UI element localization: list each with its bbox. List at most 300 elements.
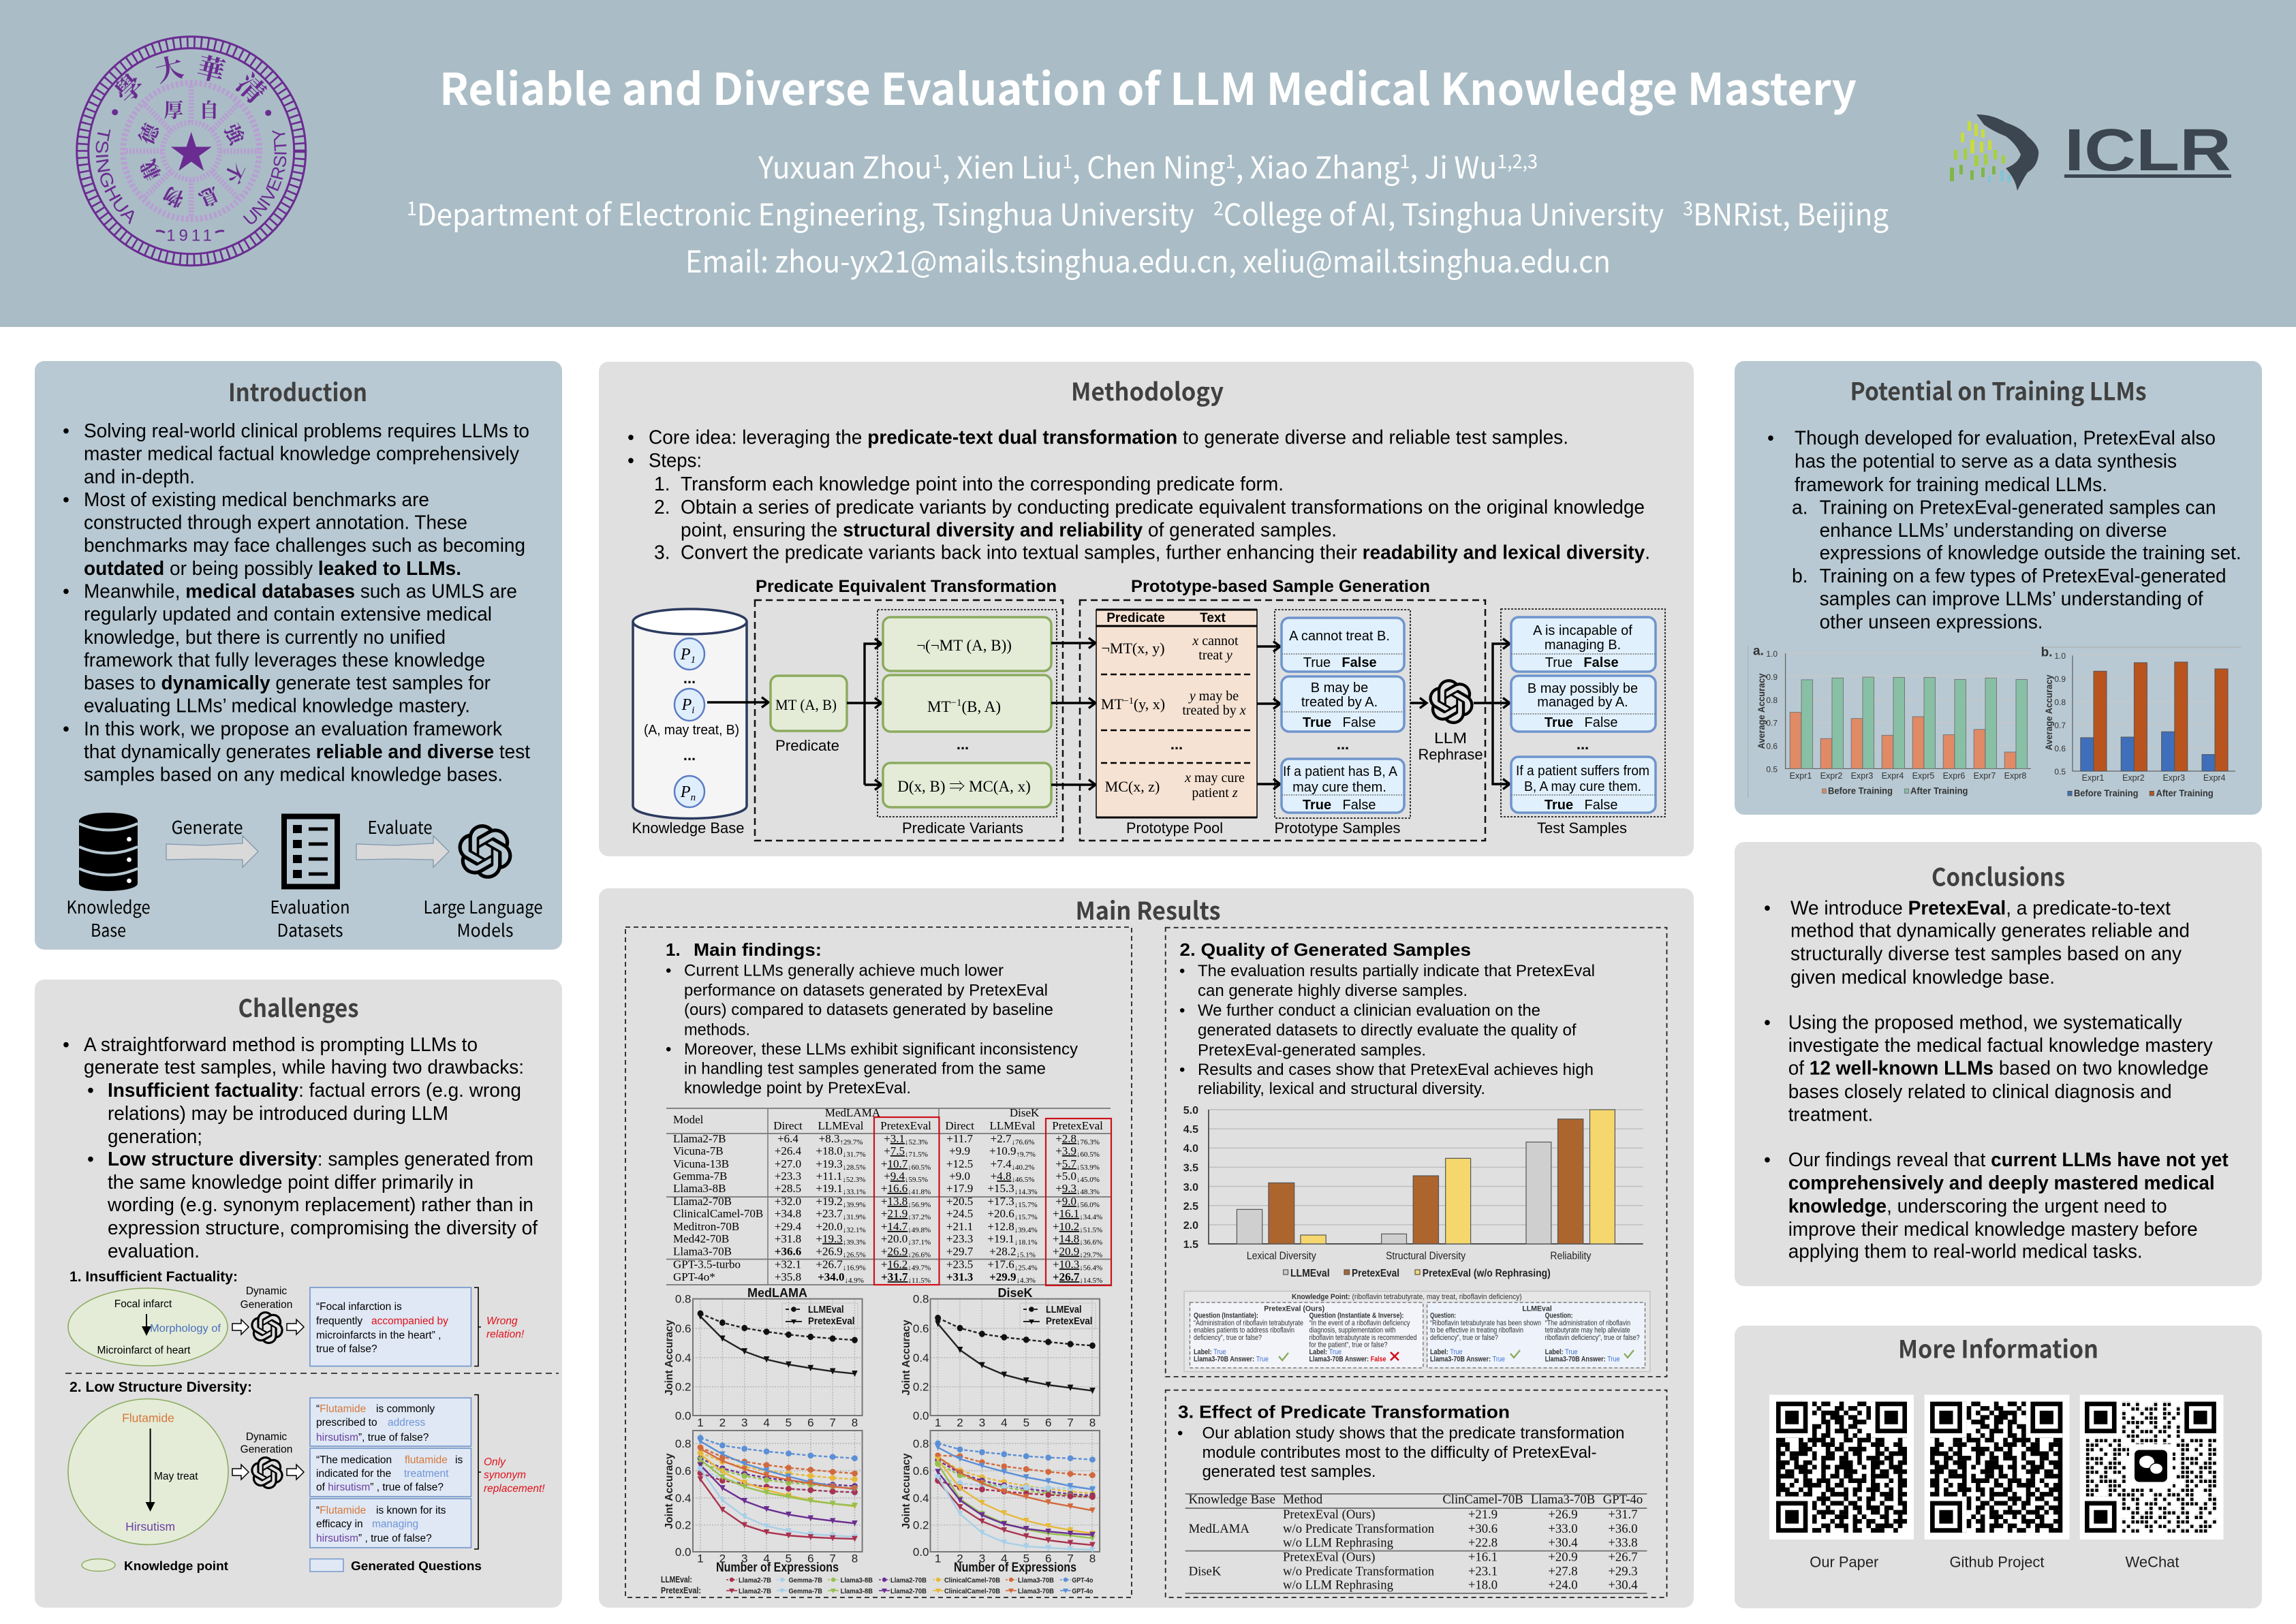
results table: ↓40.2% bbox=[1011, 1164, 1034, 1172]
results table: ↓52.3% bbox=[842, 1176, 865, 1184]
text block: introduction bullets: and in-depth. bbox=[84, 465, 195, 487]
case study comparison: PretexEval (Ours) bbox=[1264, 1305, 1324, 1313]
text block: potential bullets: other unseen expressions. bbox=[1820, 610, 2043, 632]
text block: quality bullets: can generate highly diverse samples. bbox=[1198, 982, 1468, 1000]
results table: +20.5 bbox=[946, 1195, 973, 1208]
text block: challenges bullets bbox=[63, 1033, 538, 1262]
results table: Med42-70B bbox=[673, 1232, 729, 1245]
authors: , Xien Liu bbox=[942, 144, 1062, 187]
predicate variants: ¬(¬MT (A, B)) bbox=[916, 637, 1012, 654]
results table: +11.1 bbox=[816, 1170, 842, 1183]
legend: Knowledge point bbox=[124, 1559, 228, 1573]
text block: conclusions bullets: bases closely related to clinical diagnosis and bbox=[1788, 1080, 2172, 1102]
chart legend: Gemma-7B bbox=[789, 1588, 822, 1595]
text block: challenges bullets: • bbox=[87, 1079, 94, 1101]
chart: DiseK aggregate: 0.6 bbox=[913, 1322, 929, 1335]
bar chart b: unseen expressions: Average Accuracy bbox=[2044, 674, 2054, 751]
text block: potential bullets: • bbox=[1767, 427, 1774, 449]
test samples: B may possibly be bbox=[1527, 681, 1638, 696]
results table: ↓31.9% bbox=[843, 1213, 866, 1221]
icon: evaluation checklist bbox=[284, 816, 337, 887]
ablation table: w/o Predicate Transformation bbox=[1283, 1564, 1435, 1578]
results table: ↓5.1% bbox=[1016, 1251, 1036, 1259]
authors: 1 bbox=[1226, 147, 1236, 174]
bar chart a: expressions outside training: a. bbox=[1753, 644, 1764, 658]
bar chart: diversity and reliability: 2.5 bbox=[1183, 1201, 1198, 1213]
case study comparison: Llama3-70B Answer: False bbox=[1309, 1356, 1386, 1364]
results table: +26.7 bbox=[816, 1258, 843, 1270]
bar chart: diversity and reliability: Lexical Diversity bbox=[1247, 1251, 1316, 1262]
results table: +31.3 bbox=[946, 1270, 973, 1283]
arrow: evaluate: Evaluate bbox=[368, 814, 432, 839]
chart: DiseK per model: 0.2 bbox=[913, 1519, 929, 1532]
prototype pool table: treated by x bbox=[1182, 703, 1246, 718]
authors: , Ji Wu bbox=[1410, 144, 1497, 187]
text block: conclusions bullets: • bbox=[1764, 897, 1771, 919]
panel: Introduction bbox=[35, 361, 562, 950]
bar chart a: expressions outside training: 1.0 bbox=[1766, 649, 1778, 659]
label: Large Language Models: Large Language bbox=[424, 894, 542, 919]
text block: challenges bullets: generation; bbox=[108, 1125, 202, 1147]
chart: MedLAMA aggregate: PretexEval bbox=[808, 1315, 854, 1327]
generated question boxes: address bbox=[388, 1417, 425, 1428]
heading: More Information: More Information bbox=[1898, 1330, 2098, 1366]
knowledge point ellipse: Flutamide bbox=[122, 1411, 174, 1425]
results table: GPT-4o* bbox=[673, 1270, 715, 1283]
case study comparison: Question: bbox=[1430, 1312, 1456, 1320]
text block: conclusions bullets: We introduce PretexEval, a predicate-to-text bbox=[1790, 897, 2171, 919]
label: WeChat: WeChat bbox=[2126, 1553, 2179, 1571]
bar chart a: expressions outside training: Expr4 bbox=[1882, 771, 1904, 781]
chart: DiseK per model: 12345678 bbox=[935, 1552, 1096, 1565]
text block: introduction bullets: knowledge, but there is currently no unified bbox=[84, 626, 446, 648]
case study comparison: “The administration of riboflavin bbox=[1545, 1319, 1630, 1327]
dynamic generation step: Dynamic bbox=[246, 1431, 287, 1443]
text block: methodology steps: 3. bbox=[654, 542, 670, 563]
results table: Llama3-8B bbox=[673, 1182, 726, 1195]
case study comparison: diagnosis, supplementation with bbox=[1309, 1326, 1396, 1334]
label: Knowledge Base bbox=[67, 894, 150, 942]
arrow: evaluate bbox=[356, 814, 449, 867]
results table: +29.9 bbox=[989, 1270, 1017, 1283]
text block: potential bullets: framework for training medical LLMs. bbox=[1795, 473, 2107, 495]
logo: Tsinghua University seal: 大 bbox=[153, 52, 187, 88]
panel: Main Results bbox=[599, 888, 1694, 1608]
results table: +10.9 bbox=[989, 1144, 1016, 1157]
text block: conclusions bullets: Our findings reveal that current LLMs have not yet bbox=[1788, 1149, 2229, 1170]
text block: introduction bullets: outdated or being possibly leaked to LLMs. bbox=[84, 557, 461, 579]
logo: ICLR: ICLR bbox=[2064, 117, 2231, 183]
LLM rephrase step: LLM bbox=[1434, 730, 1467, 747]
text block: quality bullets: Results and cases show that PretexEval achieves high bbox=[1198, 1061, 1594, 1079]
prototype pool table: Predicate bbox=[1106, 611, 1165, 625]
bar chart b: unseen expressions: After Training bbox=[2156, 788, 2214, 798]
heading: Potential on Training LLMs: Potential on Training LLMs bbox=[1850, 373, 2146, 408]
results table: ↓15.7% bbox=[1014, 1213, 1038, 1221]
generated question box: accompanied by bbox=[371, 1315, 448, 1327]
text block: potential bullets: has the potential to serve as a data synthesis bbox=[1795, 450, 2177, 471]
bar chart a: expressions outside training: 0.8 bbox=[1766, 696, 1778, 705]
text block: introduction bullets: • bbox=[63, 580, 69, 602]
chart: MedLAMA per model: Number of Expressions bbox=[716, 1561, 839, 1575]
case study comparison: “Riboflavin tetrabutyrate has been shown bbox=[1430, 1319, 1541, 1327]
label: Evaluation Datasets: Datasets bbox=[277, 917, 343, 942]
results table: ↓49.7% bbox=[907, 1264, 931, 1272]
results table: +36.6 bbox=[775, 1245, 801, 1258]
results table: ↓39.9% bbox=[843, 1201, 866, 1209]
bar chart a: expressions outside training: Expr1 bbox=[1790, 771, 1812, 781]
ablation table: +27.8 bbox=[1548, 1564, 1578, 1578]
results table: +32.0 bbox=[775, 1195, 801, 1208]
authors: , Xiao Zhang bbox=[1236, 144, 1400, 187]
logo: ICLR bbox=[1950, 114, 2231, 191]
heading: Introduction: Introduction bbox=[228, 373, 367, 409]
results table: ↑9.7% bbox=[1016, 1151, 1036, 1159]
logo: Tsinghua University seal: 學 bbox=[109, 68, 150, 110]
prototype pool table: treat y bbox=[1198, 648, 1232, 663]
results table: PretexEval bbox=[1052, 1119, 1103, 1132]
arrows: pool to prototype samples bbox=[1257, 646, 1280, 784]
results table: +3.1 bbox=[884, 1132, 905, 1145]
bar chart: diversity and reliability: 5.0 bbox=[1183, 1105, 1198, 1116]
chart legend: GPT-4o bbox=[1072, 1577, 1093, 1584]
logo: Tsinghua University seal: 德 bbox=[135, 119, 164, 148]
text block: challenges bullets: A straightforward method is prompting LLMs to bbox=[84, 1033, 478, 1055]
text block: methodology steps: 2. bbox=[654, 496, 670, 518]
predicate variants: −1 bbox=[951, 698, 961, 708]
heading: Conclusions: Conclusions bbox=[1932, 858, 2065, 894]
generated question boxes: hirsutism” , true of false? bbox=[316, 1533, 432, 1544]
chart legend: Llama3-70B bbox=[1018, 1588, 1054, 1595]
chart legend: PretexEval: bbox=[661, 1586, 701, 1595]
prototype pool table: (y, x) bbox=[1134, 696, 1165, 713]
results table: ↓71.5% bbox=[905, 1151, 928, 1159]
text block: methodology steps: Convert the predicate variants back into textual samples, further enhancing their readability and lexical diversity. bbox=[681, 542, 1650, 563]
bar chart a: expressions outside training: Expr8 bbox=[2004, 771, 2026, 781]
text block: introduction bullets: benchmarks may face challenges such as becoming bbox=[84, 534, 525, 556]
chart: MedLAMA per model: Joint Accuracy bbox=[664, 1453, 675, 1529]
text block: conclusions bullets: comprehensively and deeply mastered medical bbox=[1788, 1172, 2215, 1193]
dynamic generation step bbox=[232, 1285, 304, 1344]
diagram: low structure diversity bbox=[68, 1379, 545, 1549]
results table: ↓37.1% bbox=[907, 1238, 931, 1247]
generated question box: frequently bbox=[316, 1315, 362, 1327]
results table: ↑29.7% bbox=[839, 1138, 863, 1146]
callout: wrong relation: Wrong bbox=[486, 1315, 518, 1327]
case study comparison: Question: bbox=[1545, 1312, 1573, 1320]
chart: MedLAMA aggregate: 0.4 bbox=[675, 1352, 691, 1364]
text block: potential bullets bbox=[1767, 427, 2241, 632]
results table: ↓60.5% bbox=[907, 1164, 931, 1172]
chart: MedLAMA per model: 0.0 bbox=[675, 1546, 691, 1559]
text block: potential bullets: Training on PretexEval-generated samples can bbox=[1820, 497, 2216, 518]
chart: MedLAMA aggregate: 0.0 bbox=[675, 1409, 691, 1422]
authors: 1 bbox=[1062, 147, 1072, 174]
text block: main findings: • bbox=[666, 961, 671, 980]
results table: Vicuna-7B bbox=[673, 1144, 724, 1157]
prototype samples: True bbox=[1303, 798, 1331, 813]
chart legend: LLMEval: bbox=[661, 1575, 692, 1584]
results table: ↓4.3% bbox=[1017, 1277, 1036, 1285]
chart: MedLAMA aggregate: 0.2 bbox=[675, 1381, 691, 1394]
test samples: managed by A. bbox=[1537, 695, 1628, 710]
results table: +34.8 bbox=[775, 1207, 801, 1220]
prototype pool table: ¬MT(x, y) bbox=[1101, 640, 1165, 657]
generated question box: microinfarcts in the heart” , bbox=[316, 1330, 441, 1341]
label: Large Language Models bbox=[424, 894, 542, 942]
chart legend bbox=[661, 1575, 1093, 1595]
results table: +14.7 bbox=[881, 1220, 907, 1233]
prototype pool table: MC(x, z) bbox=[1105, 778, 1160, 795]
prototype pool table: x may cure bbox=[1184, 770, 1245, 785]
prototype pool table: −1 bbox=[1123, 696, 1134, 706]
text block: potential bullets: b. bbox=[1792, 565, 1808, 587]
logo: Tsinghua University seal: 1911 bbox=[166, 226, 215, 245]
knowledge base cylinder: ... bbox=[683, 747, 696, 764]
text block: introduction bullets: constructed through expert annotation. These bbox=[84, 512, 467, 533]
text block: introduction bullets: master medical factual knowledge comprehensively bbox=[84, 443, 520, 465]
results table: ClinicalCamel-70B bbox=[673, 1207, 763, 1220]
text block: introduction bullets: Solving real-world clinical problems requires LLMs to bbox=[84, 420, 529, 441]
text block: conclusions bullets: knowledge, underscoring the urgent need to bbox=[1788, 1195, 2167, 1217]
case study comparison: riboflavin tetrabutyrate is recommended bbox=[1309, 1334, 1417, 1342]
text block: potential bullets: Training on a few types of PretexEval-generated bbox=[1820, 565, 2227, 587]
results table: +23.7 bbox=[816, 1207, 843, 1220]
bar chart a: expressions outside training: 0.6 bbox=[1766, 741, 1778, 751]
icon: database bbox=[79, 813, 138, 891]
case study comparison: deficiency”, true or false? bbox=[1194, 1334, 1262, 1342]
test samples: B, A may cure them. bbox=[1524, 779, 1641, 794]
ablation table: +30.4 bbox=[1548, 1536, 1578, 1550]
text block: quality bullets: The evaluation results partially indicate that PretexEval bbox=[1198, 962, 1595, 980]
results table: +19.1 bbox=[816, 1182, 843, 1195]
emails: Email: zhou-yx21@mails.tsinghua.edu.cn, xeliu@mail.tsinghua.edu.cn bbox=[685, 238, 1611, 281]
label: Our Paper: Our Paper bbox=[1810, 1553, 1878, 1571]
generated question boxes: efficacy in bbox=[316, 1518, 363, 1530]
results table: ↓48.3% bbox=[1076, 1188, 1100, 1196]
knowledge point ellipse bbox=[68, 1399, 228, 1545]
knowledge point ellipse bbox=[68, 1288, 228, 1366]
prototype samples: False bbox=[1343, 798, 1376, 813]
subheading: effect: 3. Effect of Predicate Transformation bbox=[1178, 1402, 1510, 1422]
results table: Llama2-7B bbox=[673, 1132, 726, 1145]
results table: +17.6 bbox=[987, 1258, 1014, 1270]
results table: Llama2-70B bbox=[673, 1195, 732, 1208]
results table: +26.9 bbox=[881, 1245, 907, 1258]
text block: main findings: • bbox=[666, 1040, 671, 1059]
results table: +17.3 bbox=[987, 1195, 1014, 1208]
logo: Tsinghua University seal: 清 bbox=[230, 68, 271, 109]
text block: quality bullets bbox=[1179, 962, 1595, 1098]
results table: +6.4 bbox=[777, 1132, 798, 1145]
text block: main findings: (ours) compared to datasets generated by baseline bbox=[684, 1001, 1053, 1019]
bar chart b: unseen expressions: 1.0 bbox=[2054, 651, 2066, 661]
chart legend: Llama3-8B bbox=[841, 1588, 873, 1595]
ablation table: +31.7 bbox=[1608, 1508, 1638, 1522]
bar chart a: expressions outside training: Expr3 bbox=[1851, 771, 1873, 781]
results table: +19.2 bbox=[816, 1195, 843, 1208]
results table: ↓45.0% bbox=[1076, 1176, 1100, 1184]
results table: LLMEval bbox=[818, 1119, 864, 1132]
bar chart: diversity and reliability: 3.0 bbox=[1183, 1182, 1198, 1193]
results table: ↓26.6% bbox=[907, 1251, 931, 1259]
prototype samples: False bbox=[1341, 655, 1377, 670]
bar chart: diversity and reliability: 1.5 bbox=[1183, 1239, 1198, 1251]
panel: Potential on Training LLMs bbox=[1735, 361, 2262, 815]
text block: introduction bullets bbox=[63, 420, 530, 785]
affiliations: College of AI, Tsinghua University bbox=[1224, 191, 1683, 234]
header banner bbox=[0, 0, 2296, 327]
case study comparison: riboflavin deficiency”, true or false? bbox=[1545, 1334, 1640, 1342]
generated question box bbox=[310, 1287, 471, 1367]
panel: Conclusions bbox=[1735, 842, 2262, 1286]
prototype samples: treated by A. bbox=[1301, 695, 1378, 710]
panel: Methodology bbox=[599, 362, 1694, 856]
dynamic generation step bbox=[232, 1431, 304, 1489]
text block: quality bullets: • bbox=[1179, 1061, 1185, 1079]
text block: challenges bullets: relations) may be introduced during LLM bbox=[108, 1102, 448, 1124]
text block: methodology steps bbox=[627, 426, 1650, 563]
panel: quality of generated samples bbox=[1166, 928, 1666, 1377]
affiliations: BNRist, Beijing bbox=[1693, 191, 1889, 234]
text block: effect bullet: • bbox=[1177, 1424, 1183, 1443]
bar chart b: unseen expressions: 0.6 bbox=[2054, 744, 2066, 753]
generated question boxes: managing bbox=[372, 1518, 418, 1530]
bar chart: diversity and reliability: 3.5 bbox=[1183, 1162, 1198, 1174]
legend: Generated Questions bbox=[351, 1559, 482, 1573]
case study comparison: Question (Instantiate & Inverse): bbox=[1309, 1312, 1403, 1320]
test samples: False bbox=[1583, 655, 1619, 670]
results table: ↓59.5% bbox=[905, 1176, 928, 1184]
results table: +23.3 bbox=[946, 1232, 973, 1245]
case study comparison: “Administration of riboflavin tetrabutyrate bbox=[1194, 1319, 1303, 1327]
chart: DiseK aggregate: 0.2 bbox=[913, 1381, 929, 1394]
bar chart: diversity and reliability: 4.0 bbox=[1183, 1143, 1198, 1155]
prototype pool table bbox=[1096, 610, 1257, 837]
results table: ↓36.6% bbox=[1079, 1238, 1102, 1247]
label: Evaluation Datasets: Evaluation bbox=[270, 894, 350, 919]
predicate box: MT (A, B) bbox=[775, 696, 837, 713]
results table: ↓39.3% bbox=[843, 1238, 866, 1247]
predicate box bbox=[771, 676, 847, 754]
chart: DiseK per model bbox=[901, 1431, 1100, 1575]
results table: +13.8 bbox=[881, 1195, 907, 1208]
prototype samples: True bbox=[1303, 655, 1331, 670]
results table: +26.9 bbox=[816, 1245, 843, 1258]
knowledge base cylinder: 1 bbox=[691, 655, 696, 666]
text block: introduction bullets: regularly updated and contain extensive medical bbox=[84, 603, 492, 625]
knowledge point ellipse: Hirsutism bbox=[125, 1520, 175, 1533]
heading: Challenges: Challenges bbox=[238, 989, 358, 1025]
knowledge base cylinder: (A, may treat, B) bbox=[644, 723, 739, 738]
prototype samples: Prototype Samples bbox=[1274, 819, 1401, 837]
results table: ↓18.1% bbox=[1014, 1238, 1038, 1247]
bar chart: diversity and reliability: 2.0 bbox=[1183, 1220, 1198, 1232]
knowledge point ellipse: May treat bbox=[154, 1471, 198, 1482]
results table: PretexEval bbox=[880, 1119, 931, 1132]
results table: +18.0 bbox=[816, 1144, 843, 1157]
ablation table: +26.9 bbox=[1548, 1508, 1578, 1522]
chart: DiseK per model: 0.8 bbox=[913, 1437, 929, 1450]
chart: DiseK per model: 0.4 bbox=[913, 1492, 929, 1505]
chart: DiseK aggregate: 0.0 bbox=[913, 1409, 929, 1422]
chart: MedLAMA per model: 0.8 bbox=[675, 1437, 691, 1450]
text block: introduction bullets: bases to dynamically generate test samples for bbox=[84, 672, 491, 693]
results table: ↓60.5% bbox=[1076, 1151, 1100, 1159]
results table: +23.5 bbox=[946, 1258, 973, 1270]
generated question boxes bbox=[310, 1398, 471, 1548]
prototype samples: A cannot treat B. bbox=[1289, 629, 1390, 644]
chart: MedLAMA per model: 0.4 bbox=[675, 1492, 691, 1505]
results table: ↓15.7% bbox=[1014, 1201, 1038, 1209]
results table: +9.3 bbox=[1055, 1182, 1076, 1195]
text block: conclusions bullets: treatment. bbox=[1788, 1103, 1873, 1125]
affiliations: Department of Electronic Engineering, Tsinghua University bbox=[417, 191, 1213, 234]
chart: MedLAMA aggregate: MedLAMA bbox=[747, 1286, 807, 1300]
prototype pool table: Text bbox=[1200, 611, 1226, 625]
text block: challenges bullets: wording (e.g. synonym replacement) rather than in bbox=[107, 1193, 533, 1215]
text block: quality bullets: • bbox=[1179, 962, 1185, 980]
affiliations: 2 bbox=[1213, 194, 1224, 221]
text block: main findings: Moreover, these LLMs exhibit significant inconsistency bbox=[684, 1040, 1078, 1059]
results table: +20.9 bbox=[1053, 1245, 1079, 1258]
title: Reliable and Diverse Evaluation of LLM Medical Knowledge Mastery bbox=[439, 55, 1857, 118]
generated question boxes: “Flutamide bbox=[316, 1403, 366, 1415]
ablation table: +22.8 bbox=[1468, 1536, 1498, 1550]
arrows: predicate to variants bbox=[847, 644, 882, 785]
icon: LLM knot bbox=[459, 824, 512, 879]
text block: potential bullets: enhance LLMs’ understanding on diverse bbox=[1820, 519, 2167, 541]
logo: Tsinghua University seal: 載 bbox=[137, 156, 166, 183]
ablation table bbox=[1185, 1493, 1647, 1593]
heading: Predicate Equivalent Transformation: Predicate Equivalent Transformation bbox=[756, 577, 1057, 596]
results table: ↓41.8% bbox=[907, 1188, 931, 1196]
results table: +7.5 bbox=[884, 1144, 905, 1157]
results table: +10.2 bbox=[1053, 1220, 1079, 1233]
generated question boxes: prescribed to bbox=[316, 1417, 377, 1428]
bar chart legend: PretexEval (w/o Rephrasing) bbox=[1423, 1268, 1551, 1279]
knowledge base cylinder: n bbox=[691, 792, 696, 803]
results table: +10.3 bbox=[1053, 1258, 1079, 1270]
authors: Yuxuan Zhou bbox=[758, 144, 939, 187]
text block: conclusions bullets: applying them to real-world medical tasks. bbox=[1788, 1240, 2143, 1262]
test samples: If a patient suffers from bbox=[1516, 764, 1649, 779]
heading: Methodology: Methodology bbox=[1071, 373, 1224, 408]
subheading: main findings: Main findings: bbox=[694, 939, 822, 960]
results table: +20.0 bbox=[816, 1220, 843, 1233]
bar chart b: unseen expressions: 0.7 bbox=[2054, 721, 2066, 730]
results table: Meditron-70B bbox=[673, 1220, 739, 1233]
case study comparison: Llama3-70B Answer: True bbox=[1545, 1356, 1620, 1364]
logo: Tsinghua University seal: UNIVERSITY bbox=[243, 130, 287, 224]
knowledge base cylinder: P bbox=[682, 696, 692, 714]
heading: Main Results: Main Results bbox=[1075, 892, 1221, 927]
text block: main findings bbox=[666, 961, 1078, 1097]
dynamic generation step: Generation bbox=[241, 1444, 292, 1456]
bar chart b: unseen expressions: Expr3 bbox=[2162, 773, 2185, 783]
results table: +7.4 bbox=[991, 1157, 1012, 1170]
ablation table: +29.3 bbox=[1608, 1564, 1638, 1578]
text block: main findings: methods. bbox=[684, 1020, 750, 1039]
text block: main findings: knowledge point by PretexEval. bbox=[684, 1079, 911, 1097]
results table: ↓46.5% bbox=[1011, 1176, 1034, 1184]
logo: Tsinghua University seal: 物 bbox=[160, 182, 187, 210]
prototype samples: may cure them. bbox=[1292, 780, 1386, 795]
results table: GPT-3.5-turbo bbox=[673, 1258, 741, 1270]
results table: +35.8 bbox=[775, 1270, 801, 1283]
generated question box: true of false? bbox=[316, 1343, 377, 1355]
text block: methodology steps: • bbox=[627, 450, 634, 471]
